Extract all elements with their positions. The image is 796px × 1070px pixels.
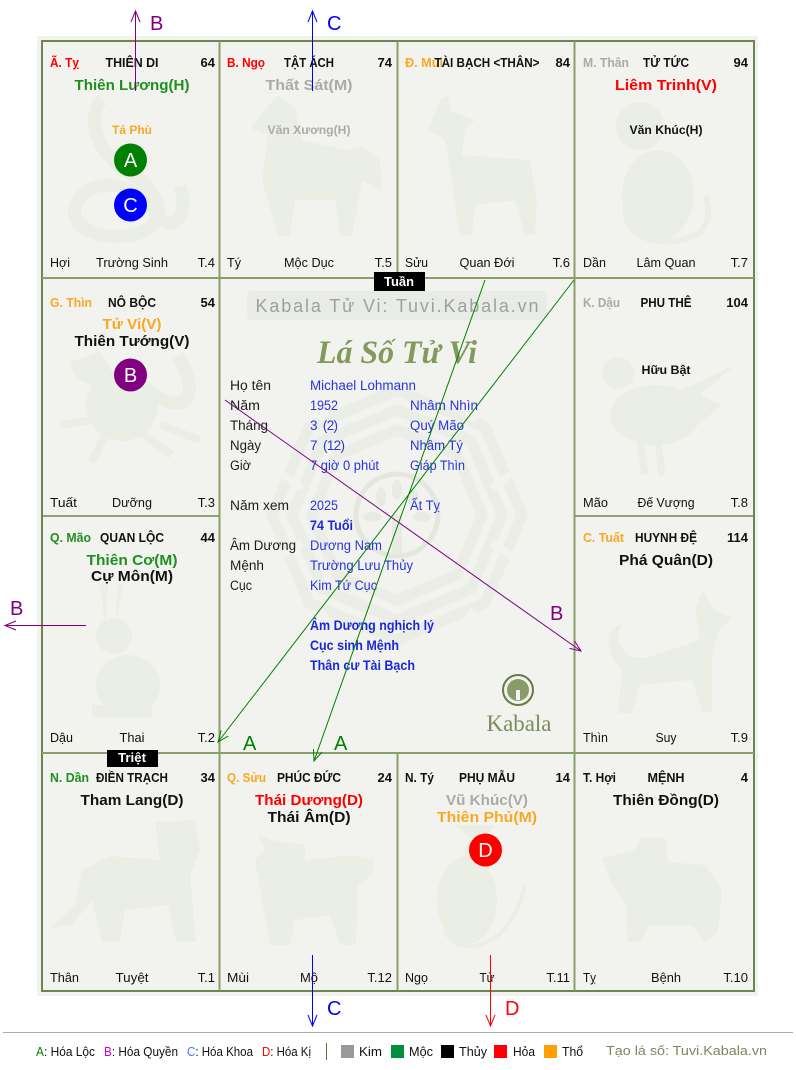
panel: Phúc Đức: Mùi [227,970,249,985]
panel: Tài Bạch: Đ. Mùi [405,55,443,70]
panel: Phụ Mẫu: Vũ Khúc(V) [446,792,528,809]
arrow: Hóa Lộc to Điền Trạch corner [218,280,574,755]
panel: Tật Ách: Mộc Dục [284,255,334,270]
personal info block: Cục sinh Mệnh [310,638,399,653]
panel: Điền Trạch [50,770,216,985]
label: Triệt [107,750,158,767]
animal: dragon [60,352,200,462]
arrow: Hóa Khoa up [312,11,341,91]
personal info block: Thân cư Tài Bạch [310,658,415,673]
personal info block: Giờ [230,458,251,473]
panel: Tài Bạch [405,55,571,270]
panel: Phu Thê: Đế Vượng [638,495,694,510]
personal info block: Quý Mão [410,418,464,433]
panel: Thiên Di: THIÊN DI [106,55,158,70]
panel: Tật Ách: Tý [227,255,241,270]
personal info block: Âm Dương nghịch lý [310,618,434,633]
badge: A [114,144,147,176]
panel: Tật Ách: Văn Xương(H) [268,123,350,137]
panel: Huynh Đệ: T.9 [731,730,748,745]
panel: Huynh Đệ: Thìn [583,730,608,745]
personal info block: Nhâm Nhìn [410,398,478,413]
panel: Điền Trạch: Tham Lang(D) [80,792,184,809]
panel: Phúc Đức: T.12 [367,970,392,985]
panel: Mệnh: T.10 [723,970,748,985]
personal info block: 7 (12) [310,438,345,453]
personal info block: 2025 [310,498,338,513]
arrow: Hóa Quyền up [136,11,163,91]
panel: Mệnh: T. Hợi [583,770,616,785]
panel: Phúc Đức: Thái Dương(D) [255,792,363,809]
panel: Phu Thê: PHU THÊ [640,295,692,310]
panel: Điền Trạch: T.1 [198,970,215,985]
legend divider [326,1043,328,1060]
panel: Phúc Đức: Thái Âm(D) [268,808,350,826]
personal info block: Mệnh [230,558,264,573]
personal info block: Giáp Thìn [410,458,465,473]
panel: Phu Thê: Hữu Bật [642,363,690,377]
label: Tuần [374,272,425,291]
animal: monkey [616,102,708,242]
personal info block: 74 Tuổi [310,518,353,533]
panel: Mệnh: Bệnh [651,970,681,985]
legend: ngũ hành: Thủy [459,1045,488,1059]
legend: tứ hóa: A: Hóa Lộc [36,1045,95,1059]
panel: Mệnh [583,770,749,985]
panel: Quan Lộc: Cự Môn(M) [91,568,173,585]
panel: Nô Bộc [50,295,216,510]
personal info block: Trường Lưu Thủy [310,558,413,573]
personal info block: Michael Lohmann [310,378,416,393]
personal info block: Dương Nam [310,538,382,553]
panel: Nô Bộc: Thiên Tướng(V) [74,333,190,350]
panel: Phụ Mẫu: Ngọ [405,970,428,985]
panel: Phu Thê: K. Dậu [583,295,620,310]
personal info block: Âm Dương [230,538,296,553]
arrow: Hóa Khoa up: C [327,13,341,35]
watermark banner: Kabala Tử Vi: Tuvi.Kabala.vn [256,296,538,316]
panel: Tật Ách: B. Ngọ [227,55,265,70]
footer link text: Tạo lá số: Tuvi.Kabala.vn [606,1043,767,1058]
panel: Tài Bạch: Sửu [405,255,428,270]
panel: Quan Lộc: Thai [120,730,145,745]
arrow: Hóa Lộc to Điền Trạch corner: A [243,733,257,755]
panel: Phụ Mẫu: PHỤ MẪU [459,770,515,785]
panel: Phúc Đức [227,770,393,985]
personal info block: Năm [230,398,260,413]
personal info block: 1952 [310,398,338,413]
panel: Phu Thê: 104 [726,295,749,310]
panel: Mệnh: MỆNH [648,770,684,785]
panel: Tật Ách: TẬT ÁCH [284,55,334,70]
personal info block: Nhâm Tý [410,438,463,453]
panel: Phụ Mẫu: T.11 [546,970,570,985]
panel: Điền Trạch: ĐIỀN TRẠCH [96,770,168,785]
legend: ngũ hành: Mộc [409,1045,433,1059]
badge: C: C [123,195,138,217]
panel: Tử Tức: Dần [583,255,606,270]
panel: Thiên Di: Ã. Tỵ [50,55,80,70]
title: Lá Số Tử Vi: Lá Số Tử Vi [316,335,478,371]
panel: Tử Tức: M. Thân [583,55,629,70]
panel: Phúc Đức: Mộ [300,970,318,985]
personal info block: Ngày [230,438,261,453]
icon: Kabala logo [486,675,552,736]
panel: Tật Ách [227,55,393,270]
panel: Quan Lộc: T.2 [198,730,215,745]
animal: ox [255,835,375,945]
panel: Tử Tức: 94 [734,55,749,70]
panel: Phu Thê [583,295,749,510]
arrow: Hóa Lộc to Phúc Đức [314,280,485,761]
footer rule [3,1032,793,1034]
panel: Mệnh: Thiên Đồng(D) [613,792,719,809]
panel: Phúc Đức: Q. Sửu [227,770,266,785]
animal: rabbit [92,584,160,717]
panel: Nô Bộc: Tử Vi(V) [102,316,162,333]
panel: Tật Ách: 74 [378,55,393,70]
panel: Nô Bộc: NÔ BỘC [108,295,157,310]
panel: Nô Bộc: Dưỡng [112,495,152,510]
legend: tứ hóa: B: Hóa Quyền [104,1045,178,1059]
panel: Quan Lộc: Dậu [50,730,73,745]
personal info block: Tháng [230,418,268,433]
panel: Điền Trạch: 34 [201,770,216,785]
watermark banner [247,291,547,320]
panel: Phúc Đức: PHÚC ĐỨC [277,770,342,785]
badge: C [114,188,147,222]
panel: Nô Bộc: Tuất [50,495,77,510]
panel: Phụ Mẫu: N. Tý [405,770,435,785]
panel: Huynh Đệ [583,530,749,745]
animal: pig [602,838,722,942]
label: Tuần: Tuần [384,275,414,289]
arrow: Hóa Khoa down: C [327,998,341,1020]
personal info block: 7 giờ 0 phút [310,458,379,473]
panel: Thiên Di [50,55,216,270]
panel: Thiên Di: Tả Phù [112,123,152,137]
legend: ngũ hành: Kim [359,1045,382,1059]
panel: Nô Bộc: T.3 [198,495,215,510]
legend: tứ hóa: D: Hóa Kị [262,1045,311,1059]
label: Triệt: Triệt [118,751,147,765]
panel: Tài Bạch: 84 [556,55,571,70]
personal info block: Năm xem [230,498,289,513]
panel: Điền Trạch: N. Dần [50,770,89,785]
panel: Tài Bạch: TÀI BẠCH <THÂN> [434,55,540,70]
panel: Thiên Di: Thiên Lương(H) [74,77,190,94]
personal info block: Kim Tứ Cục [310,578,377,593]
legend: tứ hóa: C: Hóa Khoa [187,1045,253,1059]
panel: Thiên Di: 64 [201,55,216,70]
panel: Phụ Mẫu: Thiên Phủ(M) [437,809,537,826]
animal: tiger [50,820,200,942]
zodiac animal watermarks [50,95,735,946]
panel: Huynh Đệ: Suy [656,730,677,745]
badge: D: D [478,840,493,862]
panel: Tử Tức: Liêm Trinh(V) [615,77,717,94]
arrow: Hóa Quyền left [5,598,86,626]
panel: Điền Trạch: Thân [50,970,79,985]
panel: Tử Tức: Văn Khúc(H) [630,123,703,137]
panel: Phụ Mẫu [405,770,571,985]
arrow: Hóa Quyền diagonal: B [550,603,563,625]
animal: rat [437,825,525,946]
panel: Phu Thê: Mão [583,495,608,510]
panel: Quan Lộc: QUAN LỘC [100,530,165,545]
panel: Thiên Di: T.4 [198,255,215,270]
arrow: Hóa Quyền diagonal [225,400,581,651]
legend: ngũ hành: Thổ [562,1045,583,1059]
panel: Huynh Đệ: 114 [727,530,749,545]
legend: ngũ hành [341,1045,583,1059]
personal info block: Họ tên [230,378,271,393]
panel: Huynh Đệ: Phá Quân(D) [619,552,713,569]
panel: Huynh Đệ: HUYNH ĐỆ [635,530,697,545]
arrow: Hóa Khoa down [312,955,341,1026]
chart grid [42,41,754,991]
animal: horse [250,95,382,236]
personal info block: Ất Tỵ [410,498,440,513]
panel: Tử Tức [583,55,749,270]
animal: rooster [602,357,735,475]
arrow: Hóa Kị down [490,955,519,1026]
animal: goat [428,95,537,235]
icon: Kabala logo: Kabala [486,711,552,736]
panel: Quan Lộc: Thiên Cơ(M) [86,552,178,569]
badge: B [114,358,147,392]
panel: Thiên Di: Hợi [50,255,70,270]
panel: Phụ Mẫu: 14 [556,770,571,785]
arrow: Hóa Kị down: D [505,998,519,1020]
panel: Phu Thê: T.8 [731,495,748,510]
panel: Tử Tức: T.7 [731,255,748,270]
panel: Nô Bộc: 54 [201,295,216,310]
badge: D [469,834,502,866]
panel: Phúc Đức: 24 [378,770,393,785]
panel: Phụ Mẫu: Tử [480,970,495,985]
personal info block [230,378,478,673]
panel: Tử Tức: TỬ TỨC [643,55,690,70]
panel: Mệnh: Tỵ [583,970,596,985]
panel: Tử Tức: Lâm Quan [636,255,696,270]
badge: B: B [124,365,137,387]
personal info block: Cục [230,578,252,593]
panel: Tài Bạch: Quan Đới [460,255,515,270]
panel: Nô Bộc: G. Thìn [50,295,92,310]
panel: Quan Lộc: Q. Mão [50,530,91,545]
panel: Tài Bạch: T.6 [553,255,570,270]
panel: Tật Ách: T.5 [375,255,392,270]
arrow: Hóa Lộc to Phúc Đức: A [334,733,348,755]
bagua watermark [267,385,527,645]
arrow: Hóa Quyền up: B [150,13,163,35]
legend: ngũ hành: Hỏa [513,1045,535,1059]
panel: Thiên Di: Trường Sinh [96,255,168,270]
panel: Tật Ách: Thất Sát(M) [266,77,352,94]
panel: Điền Trạch: Tuyệt [116,970,149,985]
animal: dog [608,590,732,713]
panel: Quan Lộc: 44 [201,530,216,545]
arrow: Hóa Quyền left: B [10,598,23,620]
panel: Mệnh: 4 [741,770,749,785]
panel: Quan Lộc [50,530,216,745]
badge: A: A [124,150,138,172]
animal: snake [75,100,183,236]
panel: Huynh Đệ: C. Tuất [583,530,625,545]
legend: tứ hóa [36,1045,311,1059]
personal info block: 3 (2) [310,418,338,433]
